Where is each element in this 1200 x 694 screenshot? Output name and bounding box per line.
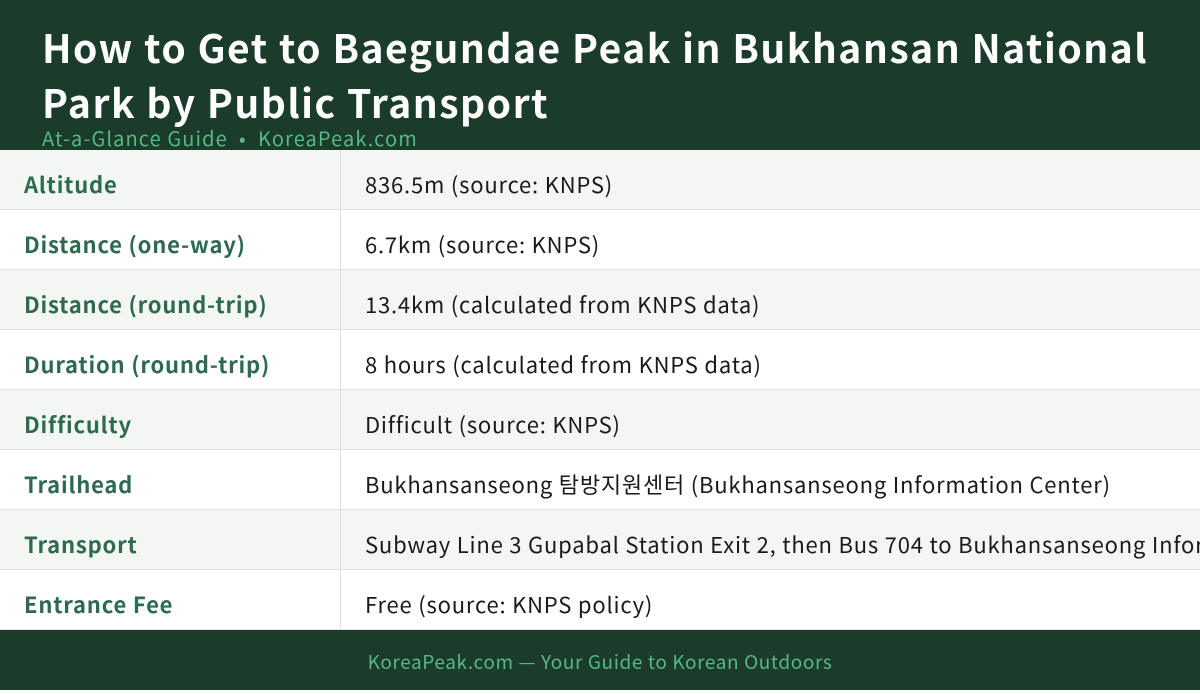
row: trailhead: Bukhansanseong 탐방지원센터 (Bukhansanseong Information Center) bbox=[365, 468, 1111, 500]
row: transport bbox=[0, 510, 1200, 570]
row: transport: Transport bbox=[24, 528, 138, 560]
row: duration: Duration (round-trip) bbox=[24, 348, 270, 380]
row: entrance fee: Entrance Fee bbox=[24, 588, 173, 620]
row: entrance fee bbox=[0, 570, 1200, 630]
row: distance one-way: 6.7km (source: KNPS) bbox=[365, 228, 600, 260]
row: distance one-way: Distance (one-way) bbox=[24, 228, 246, 260]
header bbox=[0, 0, 1200, 150]
footer bbox=[0, 630, 1200, 690]
row: altitude: Altitude bbox=[24, 168, 118, 200]
row: distance round-trip bbox=[0, 270, 1200, 330]
row: distance round-trip: Distance (round-trip) bbox=[24, 288, 267, 320]
row: trailhead: Trailhead bbox=[24, 468, 133, 500]
title: How to Get to Baegundae Peak in Bukhansan National Park by Public Transport bbox=[42, 19, 1148, 130]
row: altitude: 836.5m (source: KNPS) bbox=[365, 168, 613, 200]
row: difficulty: Difficult (source: KNPS) bbox=[365, 408, 621, 440]
footer: KoreaPeak.com — Your Guide to Korean Outdoors bbox=[368, 648, 832, 675]
row: distance round-trip: 13.4km (calculated from KNPS data) bbox=[365, 288, 760, 320]
row: difficulty bbox=[0, 390, 1200, 450]
row: trailhead bbox=[0, 450, 1200, 510]
row: difficulty: Difficulty bbox=[24, 408, 132, 440]
row: duration bbox=[0, 330, 1200, 390]
row: altitude bbox=[0, 150, 1200, 210]
row: distance one-way bbox=[0, 210, 1200, 270]
table: trail facts bbox=[0, 150, 1200, 630]
row: entrance fee: Free (source: KNPS policy) bbox=[365, 588, 653, 620]
row: duration: 8 hours (calculated from KNPS data) bbox=[365, 348, 762, 380]
subtitle: At-a-Glance Guide • KoreaPeak.com bbox=[42, 123, 418, 152]
